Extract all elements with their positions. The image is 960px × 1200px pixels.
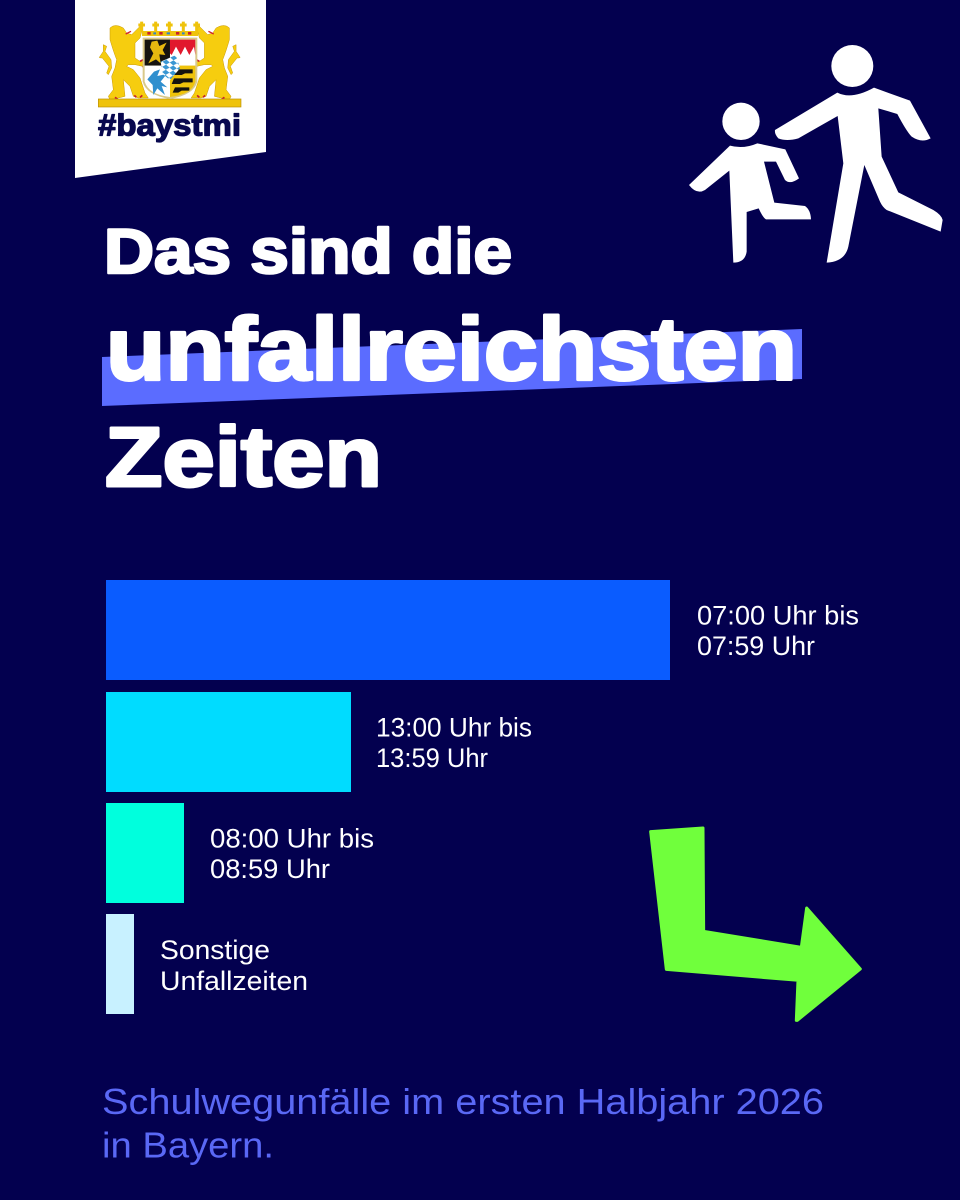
bar: 07:00 bbox=[106, 580, 670, 680]
label: sonstige: Unfallzeiten bbox=[160, 966, 308, 996]
logo banner bbox=[75, 0, 266, 178]
icon: child bbox=[689, 103, 811, 263]
label: 07:00 bbox=[697, 600, 859, 661]
footer text: in Bayern. bbox=[102, 1124, 274, 1166]
bar: sonstige bbox=[106, 914, 134, 1014]
icon: adult and child walking bbox=[689, 45, 943, 263]
label: 08:00: 08:00 Uhr bis bbox=[210, 824, 374, 854]
label: 07:00: 07:59 Uhr bbox=[697, 631, 815, 661]
footer text bbox=[102, 1081, 824, 1166]
title line 3: Zeiten bbox=[105, 410, 382, 504]
hashtag: #baystmi bbox=[98, 108, 241, 142]
label: 07:00: 07:00 Uhr bis bbox=[697, 600, 859, 630]
icon: right lion bbox=[191, 25, 240, 100]
label: 13:00: 13:00 Uhr bis bbox=[376, 712, 532, 742]
label: sonstige: Sonstige bbox=[160, 935, 270, 965]
footer text: Schulwegunfälle im ersten Halbjahr 2026 bbox=[102, 1081, 824, 1122]
arrow bbox=[651, 828, 860, 1020]
title line 1: Das sind die bbox=[104, 217, 512, 287]
icon: crest shield and crown bbox=[98, 22, 241, 107]
label: 13:00: 13:59 Uhr bbox=[376, 743, 488, 773]
icon: adult bbox=[775, 45, 943, 263]
label: 13:00 bbox=[376, 712, 532, 773]
title highlight bbox=[102, 329, 802, 406]
label: 08:00 bbox=[210, 824, 374, 884]
icon: left lion bbox=[99, 25, 148, 100]
title line 2: unfallreichsten bbox=[106, 298, 797, 398]
label: sonstige bbox=[160, 935, 308, 996]
bar: 08:00 bbox=[106, 803, 184, 903]
title bbox=[102, 217, 802, 504]
bar chart bbox=[106, 580, 859, 1014]
label: 08:00: 08:59 Uhr bbox=[210, 854, 330, 884]
bar: 13:00 bbox=[106, 692, 351, 792]
